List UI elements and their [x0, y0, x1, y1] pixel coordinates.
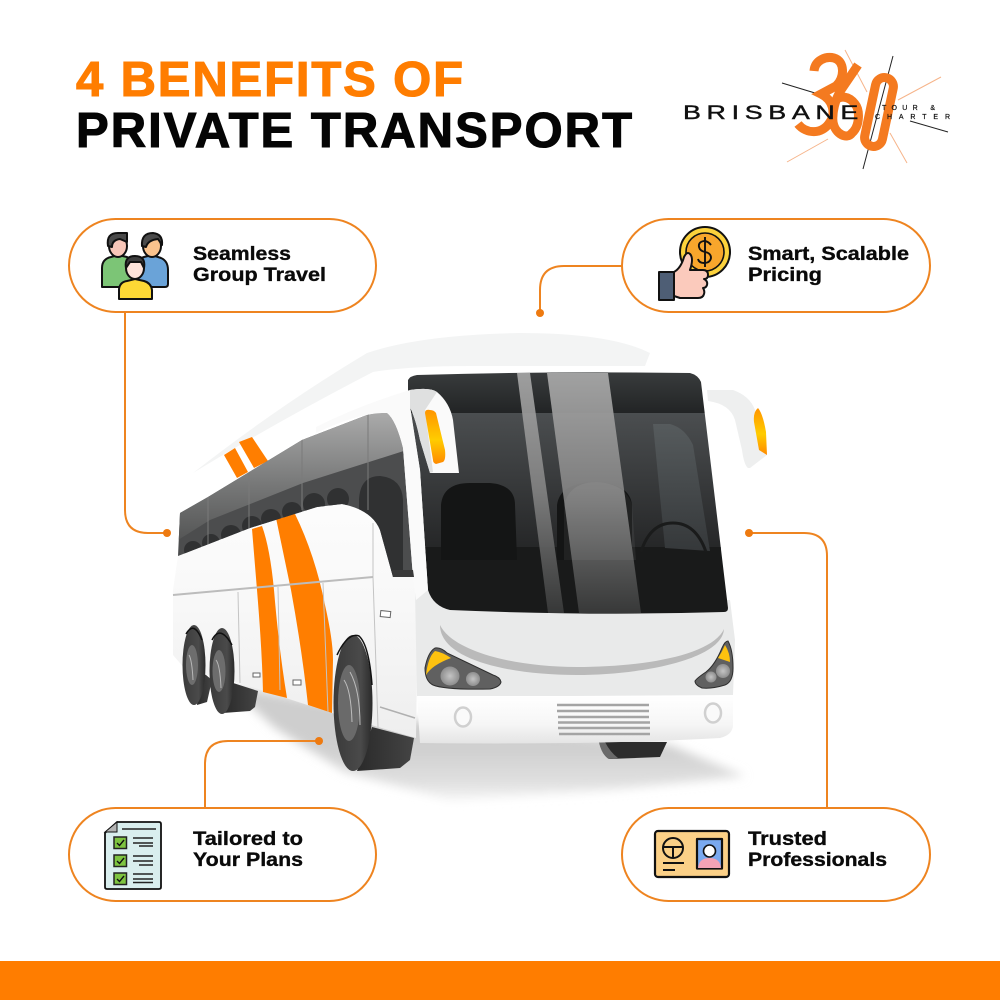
logo tagline: TOUR &: [882, 105, 937, 112]
side windows: [178, 413, 412, 577]
logo: Brisbane 360 Tour & Charter: [683, 50, 952, 169]
mirror arm inner shading: [410, 389, 437, 473]
label: Seamless: [193, 243, 291, 265]
panel: smart scalable pricing: [622, 219, 930, 312]
label: Tailored to: [193, 828, 303, 850]
panel: tailored to your plans: [69, 808, 376, 901]
side handles: [253, 611, 391, 685]
upper orange roof stripes: [224, 437, 268, 478]
icon: checklist: [105, 822, 161, 889]
label: Smart, Scalable: [748, 243, 909, 265]
front face: [415, 585, 735, 697]
panel: trusted professionals: [622, 808, 930, 901]
front axle under bumper: [599, 742, 667, 759]
right mirror: [707, 390, 767, 468]
label: Pricing: [748, 264, 822, 286]
rear wheels: [182, 625, 234, 714]
label: Group Travel: [193, 264, 326, 286]
footer bar: [0, 961, 1000, 1000]
connector: group travel: [125, 313, 171, 537]
ground shadow: [228, 685, 745, 800]
label: [748, 828, 887, 871]
logo numerals 360: [798, 58, 895, 148]
front tyre back: [599, 742, 618, 759]
icon: group of people: [102, 233, 168, 299]
logo tagline 2: CHARTER: [875, 114, 952, 121]
label: Trusted: [748, 828, 827, 850]
logo wordmark: BRISBANE: [683, 103, 864, 124]
connector: pricing: [536, 266, 622, 317]
label: [193, 828, 303, 871]
waist line: [173, 577, 373, 595]
white A pillar and left mirror arm: [316, 389, 459, 600]
label: Professionals: [748, 849, 887, 871]
roof reflection: [193, 333, 650, 473]
bumper: [417, 696, 733, 743]
logo rays: [782, 50, 948, 169]
front wheel tread: [357, 727, 414, 771]
side body: [173, 440, 418, 738]
left mirror lamp: [425, 410, 445, 464]
label: Your Plans: [193, 849, 303, 871]
label: [193, 243, 326, 286]
front wheel: [334, 635, 372, 771]
connector: trusted professionals: [745, 529, 827, 808]
right mirror lamp: [754, 408, 767, 455]
driver side window reflection: [653, 424, 710, 551]
reflection stripes: [517, 373, 564, 613]
front grille: [557, 705, 650, 734]
title line 1: 4 BENEFITS OF: [76, 53, 463, 107]
dark mirror bracket: [392, 570, 414, 577]
left headlight: [425, 648, 501, 689]
panel: seamless group travel: [69, 219, 376, 312]
title line 2: PRIVATE TRANSPORT: [76, 104, 632, 158]
icon: coin and thumbs up: [659, 227, 730, 300]
connector: tailored plans: [205, 737, 323, 808]
label: [748, 243, 909, 286]
curved swoosh: [440, 625, 724, 675]
rear axle tread: [197, 670, 258, 713]
right headlight: [695, 641, 733, 688]
fog lights: [455, 704, 721, 726]
seats: [441, 483, 516, 547]
illustration: coach bus: [170, 333, 767, 800]
icon: driver licence: [655, 831, 729, 877]
steering wheel: [641, 523, 706, 552]
title: [76, 53, 632, 158]
windshield: [400, 370, 740, 617]
lower orange stripes: [252, 514, 333, 713]
side panel lines: [238, 523, 415, 727]
